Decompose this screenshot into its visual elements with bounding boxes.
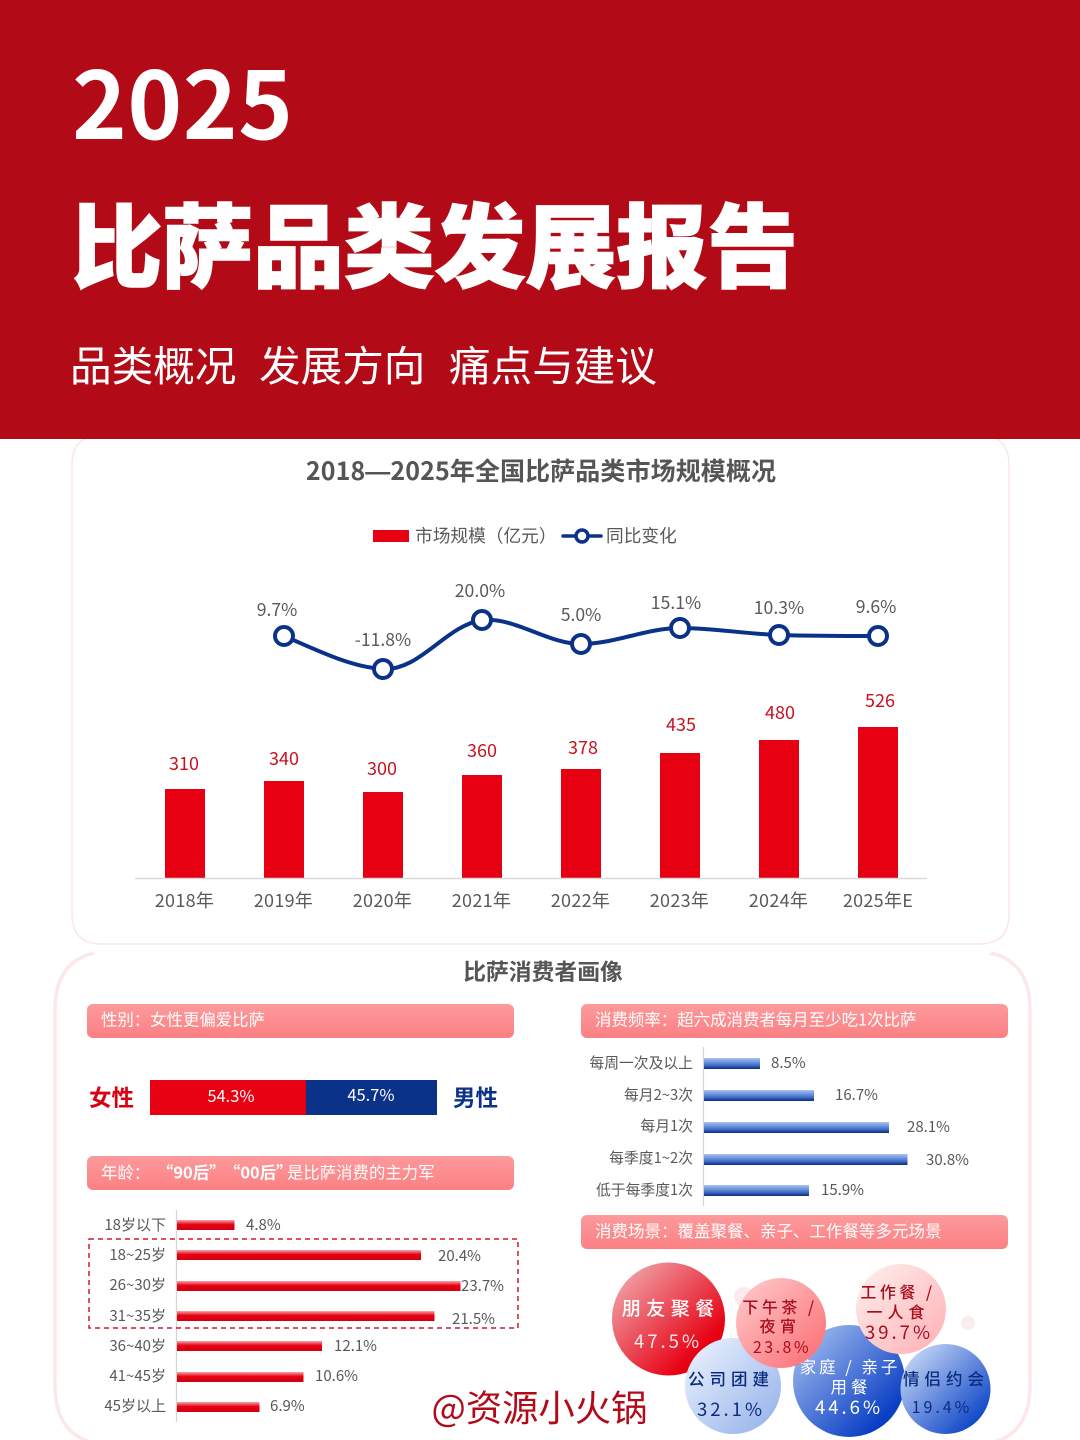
section bar: scenes xyxy=(581,1215,1008,1249)
section bar: gender xyxy=(87,1004,514,1038)
frequency bar chart: 16.7% xyxy=(835,1084,878,1105)
bar chart: market size: 378 xyxy=(568,734,598,760)
frequency bar chart: 28.1% xyxy=(907,1116,950,1137)
bar chart: market size: 2018年 xyxy=(155,887,214,913)
title year: 2025 xyxy=(72,31,293,166)
bar chart: market size: 2022年 xyxy=(551,887,610,913)
bar chart: market size xyxy=(135,687,927,913)
main title: 比萨品类发展报告 xyxy=(72,176,798,307)
line chart: yoy change: 20.0% xyxy=(455,578,505,603)
age bar chart: 18岁以下 xyxy=(104,1214,166,1235)
bar chart: market size: 300 xyxy=(367,755,397,781)
line chart: yoy change: 9.7% xyxy=(257,597,297,622)
line chart: yoy change xyxy=(257,578,896,678)
legend: 市场规模（亿元） xyxy=(415,522,557,548)
section bar: frequency: 消费频率：超六成消费者每月至少吃1次比萨 xyxy=(595,1006,916,1030)
frequency bar chart xyxy=(589,1047,969,1206)
age bar chart: 4.8% xyxy=(246,1214,281,1235)
bubble: company xyxy=(685,1338,781,1434)
bubble: couples: 19.4% xyxy=(912,1394,972,1418)
legend xyxy=(373,522,677,548)
age bar chart: 31~35岁 xyxy=(109,1305,166,1326)
section bar: age: “00后” xyxy=(224,1160,293,1184)
bubble: afternoon tea: 下午茶 / xyxy=(742,1294,818,1318)
bubble chart: scenes xyxy=(612,1262,990,1437)
bubble: family: 用餐 xyxy=(830,1374,872,1398)
subtitle: pain points: 痛点与建议 xyxy=(449,333,657,393)
line chart: yoy change: 5.0% xyxy=(561,602,601,627)
bar chart: market size: 360 xyxy=(467,737,497,763)
age bar chart: 23.7% xyxy=(461,1275,504,1296)
bar chart: market size: 2020年 xyxy=(353,887,412,913)
bar chart: market size: 310 xyxy=(169,750,199,776)
section bar: age: 年龄： xyxy=(101,1160,150,1184)
section bar: age: 是比萨消费的主力军 xyxy=(287,1160,435,1184)
watermark: @资源小火锅 xyxy=(432,1380,647,1432)
bubble: work meal: 工作餐 / xyxy=(860,1279,936,1303)
bubble: family: 44.6% xyxy=(815,1394,883,1420)
frequency bar chart: 30.8% xyxy=(926,1149,969,1170)
age bar chart: 6.9% xyxy=(270,1395,305,1416)
bar chart: market size: 526 xyxy=(865,687,895,713)
frequency bar chart: 每月1次 xyxy=(640,1115,693,1136)
bubble: company: 32.1% xyxy=(697,1396,765,1422)
section bar: scenes: 消费场景：覆盖聚餐、亲子、工作餐等多元场景 xyxy=(595,1218,942,1242)
bar chart: market size: 2023年 xyxy=(650,887,709,913)
panel: consumer profile xyxy=(55,947,1030,1440)
frequency bar chart: 每月2~3次 xyxy=(624,1084,693,1105)
profile heading: 比萨消费者画像 xyxy=(463,954,623,987)
age bar chart: 20.4% xyxy=(438,1245,481,1266)
age bar chart: 26~30岁 xyxy=(109,1274,166,1295)
gender split bar: 54.3% xyxy=(207,1083,255,1107)
age bar chart: 45岁以上 xyxy=(104,1395,166,1416)
age bar chart: 18~25岁 xyxy=(109,1244,166,1265)
gender split bar xyxy=(89,1080,498,1115)
bubble: friends xyxy=(612,1262,725,1376)
legend: 同比变化 xyxy=(606,522,677,548)
subtitle: development direction: 发展方向 xyxy=(259,333,425,393)
subtitle: 品类概况 xyxy=(70,333,236,393)
bar chart: market size: 2025年E xyxy=(843,887,913,913)
section bar: age xyxy=(87,1156,514,1190)
bar chart: market size: 340 xyxy=(269,745,299,771)
bubble: friends: 朋友聚餐 xyxy=(622,1294,720,1321)
age bar chart: 21.5% xyxy=(452,1308,495,1329)
bar chart: market size: 480 xyxy=(765,699,795,725)
bubble: couples xyxy=(900,1344,990,1434)
section bar: age: “90后” xyxy=(157,1160,226,1184)
age bar chart: 36~40岁 xyxy=(109,1335,166,1356)
highlight box: core age groups xyxy=(89,1239,518,1328)
bubble: afternoon tea xyxy=(736,1278,826,1368)
panel: market size xyxy=(72,435,1009,944)
bubble: company: 公司团建 xyxy=(688,1366,774,1390)
market heading: 2018—2025年全国比萨品类市场规模概况 xyxy=(306,452,776,488)
bubble: family: 家庭 / 亲子 xyxy=(800,1354,900,1378)
bubble: couples: 情侣约会 xyxy=(903,1366,989,1390)
frequency bar chart: 15.9% xyxy=(821,1179,864,1200)
line chart: yoy change: -11.8% xyxy=(355,627,411,652)
age bar chart: 10.6% xyxy=(315,1365,358,1386)
bubble: friends: 47.5% xyxy=(634,1328,702,1354)
frequency bar chart: 8.5% xyxy=(771,1052,806,1073)
line chart: yoy change: 9.6% xyxy=(856,594,896,619)
age bar chart: 41~45岁 xyxy=(109,1365,166,1386)
section bar: gender: 性别：女性更偏爱比萨 xyxy=(101,1006,265,1030)
section bar: frequency xyxy=(581,1004,1008,1038)
bar chart: market size: 2024年 xyxy=(749,887,808,913)
age bar chart: 12.1% xyxy=(334,1335,377,1356)
frequency bar chart: 低于每季度1次 xyxy=(596,1179,693,1200)
bar chart: market size: 2019年 xyxy=(254,887,313,913)
bubble: work meal: 一人食 xyxy=(866,1299,930,1323)
bar chart: market size: 2021年 xyxy=(452,887,511,913)
bubble: work meal: 39.7% xyxy=(865,1319,933,1345)
bubble: work meal xyxy=(856,1264,946,1354)
bubble: afternoon tea: 23.8% xyxy=(753,1334,811,1358)
bubble: afternoon tea: 夜宵 xyxy=(759,1313,801,1337)
line chart: yoy change: 15.1% xyxy=(651,590,701,615)
header banner xyxy=(0,0,1080,439)
bar chart: market size: 435 xyxy=(666,711,696,737)
gender split bar: 女性 xyxy=(89,1081,134,1113)
line chart: yoy change: 10.3% xyxy=(754,595,804,620)
bubble: family xyxy=(793,1325,905,1437)
frequency bar chart: 每周一次及以上 xyxy=(589,1052,693,1073)
age bar chart xyxy=(89,1210,518,1422)
gender split bar: 45.7% xyxy=(347,1082,395,1106)
frequency bar chart: 每季度1~2次 xyxy=(609,1147,693,1168)
gender split bar: 男性 xyxy=(453,1081,498,1113)
